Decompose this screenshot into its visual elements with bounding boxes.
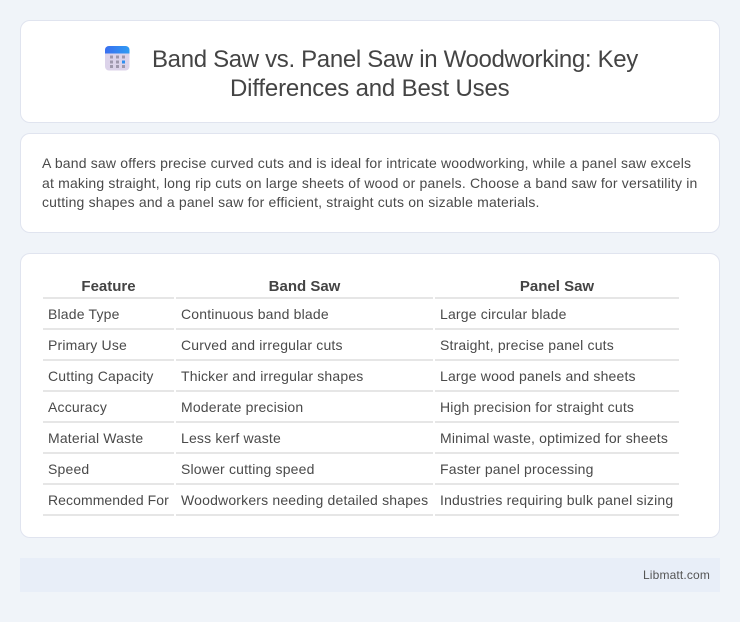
row: Speed: Speed xyxy=(48,461,89,477)
row: Recommended For: Industries requiring bulk panel sizing xyxy=(440,492,673,508)
row: Accuracy: Moderate precision xyxy=(181,399,303,415)
row: Speed xyxy=(48,461,594,477)
row: Cutting Capacity xyxy=(48,368,636,384)
panel: summary card xyxy=(20,133,720,233)
row: Material Waste xyxy=(48,430,668,446)
row: Blade Type xyxy=(48,306,567,322)
header row: Band Saw xyxy=(269,278,340,295)
row: Speed: Faster panel processing xyxy=(440,461,594,477)
row: Recommended For: Woodworkers needing detailed shapes xyxy=(181,492,428,508)
summary text: at making straight, long rip cuts on large sheets of wood or panels. Choose a band saw for versatility in xyxy=(42,174,697,190)
row: Material Waste: Less kerf waste xyxy=(181,430,281,446)
header row: Feature xyxy=(81,278,136,295)
summary text: cutting shapes and a panel saw for efficient, straight cuts on sizable materials. xyxy=(42,194,540,210)
row: Recommended For: Recommended For xyxy=(48,492,169,508)
row: Accuracy: Accuracy xyxy=(48,399,107,415)
row: Blade Type: Large circular blade xyxy=(440,306,567,322)
row: Blade Type: Continuous band blade xyxy=(181,306,329,322)
row: Primary Use xyxy=(48,337,614,353)
row: Blade Type: Blade Type xyxy=(48,306,120,322)
row: Speed: Slower cutting speed xyxy=(181,461,315,477)
header row: Panel Saw xyxy=(520,278,594,295)
title: Differences and Best Uses xyxy=(230,75,509,102)
panel: title card xyxy=(20,20,720,123)
header row xyxy=(81,278,594,295)
comparison table xyxy=(43,278,679,516)
footer credit: Libmatt.com xyxy=(643,568,710,582)
row: Material Waste: Minimal waste, optimized for sheets xyxy=(440,430,668,446)
row: Primary Use: Primary Use xyxy=(48,337,127,353)
row: Cutting Capacity: Cutting Capacity xyxy=(48,368,154,384)
icon: calendar xyxy=(105,46,130,70)
row: Material Waste: Material Waste xyxy=(48,430,143,446)
row: Primary Use: Straight, precise panel cuts xyxy=(440,337,614,353)
row: Primary Use: Curved and irregular cuts xyxy=(181,337,343,353)
row: Cutting Capacity: Large wood panels and sheets xyxy=(440,368,636,384)
row: Accuracy: High precision for straight cuts xyxy=(440,399,634,415)
row: Cutting Capacity: Thicker and irregular shapes xyxy=(181,368,363,384)
footer bar xyxy=(20,558,720,592)
title xyxy=(152,46,638,102)
summary text xyxy=(42,155,697,210)
panel: comparison table card xyxy=(20,253,720,538)
row: Recommended For xyxy=(48,492,673,508)
title: Band Saw vs. Panel Saw in Woodworking: Key xyxy=(152,46,638,73)
row: Accuracy xyxy=(48,399,634,415)
summary text: A band saw offers precise curved cuts and is ideal for intricate woodworking, while a panel saw excels xyxy=(42,155,691,171)
